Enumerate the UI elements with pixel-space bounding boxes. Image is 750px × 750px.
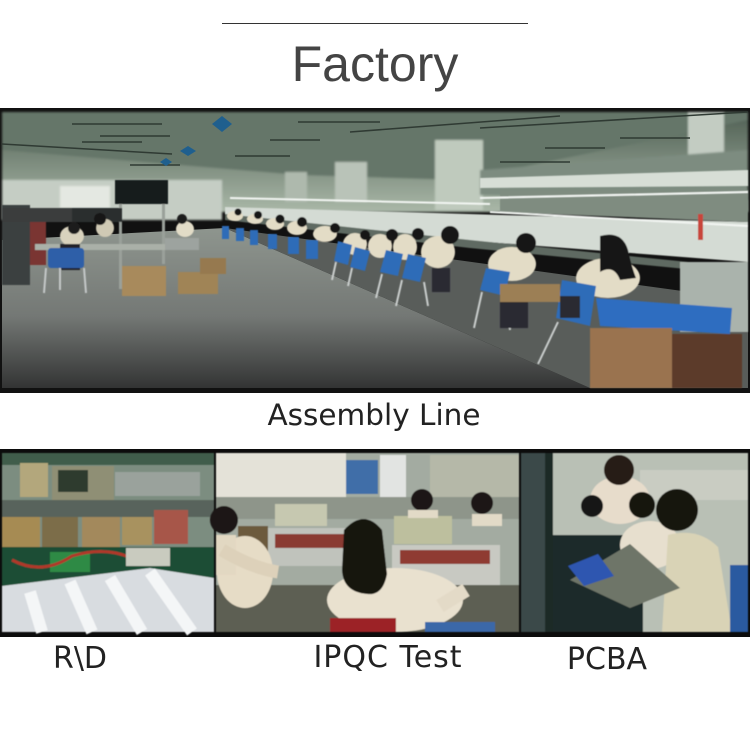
title: Factory <box>292 36 458 92</box>
ceiling <box>2 112 748 220</box>
tan bench box <box>500 284 560 302</box>
panel: lower photo strip <box>0 449 750 637</box>
caption: IPQC Test: IPQC Test <box>313 640 463 675</box>
title rule <box>222 23 528 24</box>
caption: R\D: R\D <box>53 641 107 676</box>
blue crates <box>596 298 732 334</box>
floor <box>2 228 590 388</box>
left workers <box>60 226 84 246</box>
ceiling fans and beams <box>2 112 748 165</box>
dark legs <box>432 268 580 328</box>
caption: PCBA: PCBA <box>567 642 647 677</box>
photo: PCBA <box>521 453 748 632</box>
left boxes <box>122 266 166 296</box>
left racks <box>2 205 30 285</box>
ceiling signs <box>160 116 232 166</box>
right floor <box>225 228 748 388</box>
cardboard boxes <box>590 328 672 388</box>
signal light <box>698 214 703 240</box>
panel: assembly line photo <box>0 108 750 393</box>
blue chairs <box>222 226 596 326</box>
caption: assembly line: Assembly Line <box>267 398 481 432</box>
left table <box>35 244 195 250</box>
assembly benches <box>225 207 748 262</box>
photo: IPQC Test <box>210 453 519 632</box>
scoreboard <box>115 180 168 204</box>
photo: R\D <box>2 453 214 632</box>
far workers <box>227 211 640 298</box>
